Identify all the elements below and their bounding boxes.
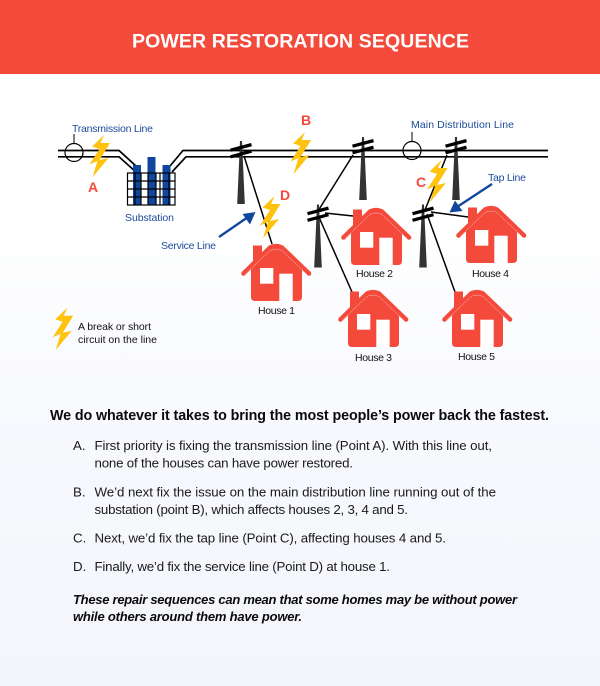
item B: B. xyxy=(73,484,86,500)
fault D: D xyxy=(280,187,290,203)
substation xyxy=(125,157,175,224)
legend: circuit on the line xyxy=(78,334,157,346)
house 4 xyxy=(458,208,524,280)
tap line callout xyxy=(450,172,526,212)
item D: Finally, we’d fix the service line (Point D) at house 1. xyxy=(94,559,390,574)
repair list xyxy=(73,438,496,574)
fault B xyxy=(290,112,311,174)
closing note xyxy=(73,592,518,624)
fault D xyxy=(260,187,290,238)
item A xyxy=(73,438,492,470)
house 4: House 4 xyxy=(472,268,509,280)
fault A xyxy=(88,135,110,195)
item B: We’d next fix the issue on the main distribution line running out of the xyxy=(94,484,496,500)
label: transmission line: Transmission Line xyxy=(72,123,153,135)
house 1 xyxy=(244,246,309,317)
house 5 xyxy=(444,292,510,363)
item A: A. xyxy=(73,438,86,453)
fault C: C xyxy=(416,174,426,190)
main distribution line marker xyxy=(403,119,514,160)
item D: D. xyxy=(73,559,86,574)
fault C xyxy=(416,160,448,202)
house 1: House 1 xyxy=(258,305,295,317)
heading statement: We do whatever it takes to bring the most people’s power back the fastest. xyxy=(50,408,549,424)
legend: A break or short xyxy=(78,321,151,333)
item A: First priority is fixing the transmission line (Point A). With this line out, xyxy=(94,438,492,453)
fault B: B xyxy=(301,112,311,128)
closing note: while others around them have power. xyxy=(73,609,302,624)
power network diagram xyxy=(53,112,548,364)
label: main distribution line: Main Distribution Line xyxy=(411,119,514,131)
title: POWER RESTORATION SEQUENCE xyxy=(132,30,469,52)
transmission line marker xyxy=(65,123,153,162)
house 3 xyxy=(340,292,406,364)
house 3: House 3 xyxy=(355,352,392,364)
main power lines xyxy=(58,150,548,172)
legend xyxy=(53,308,157,350)
service and tap wires xyxy=(244,155,468,292)
closing note: These repair sequences can mean that some homes may be without power xyxy=(73,592,518,607)
service line callout: Service Line xyxy=(161,240,216,252)
item B xyxy=(73,484,496,517)
item C: Next, we’d fix the tap line (Point C), affecting houses 4 and 5. xyxy=(94,530,446,546)
utility poles xyxy=(230,137,466,268)
house 5: House 5 xyxy=(458,351,495,363)
tap line callout: Tap Line xyxy=(488,172,526,184)
fault A: A xyxy=(88,179,98,195)
item C: C. xyxy=(73,530,86,546)
label: substation: Substation xyxy=(125,212,174,224)
house 2: House 2 xyxy=(356,268,393,280)
house 2 xyxy=(344,210,409,280)
item B: substation (point B), which affects houses 2, 3, 4 and 5. xyxy=(94,502,408,517)
item A: none of the houses can have power restored. xyxy=(94,456,353,470)
service line callout xyxy=(161,212,256,252)
header banner xyxy=(0,0,600,74)
